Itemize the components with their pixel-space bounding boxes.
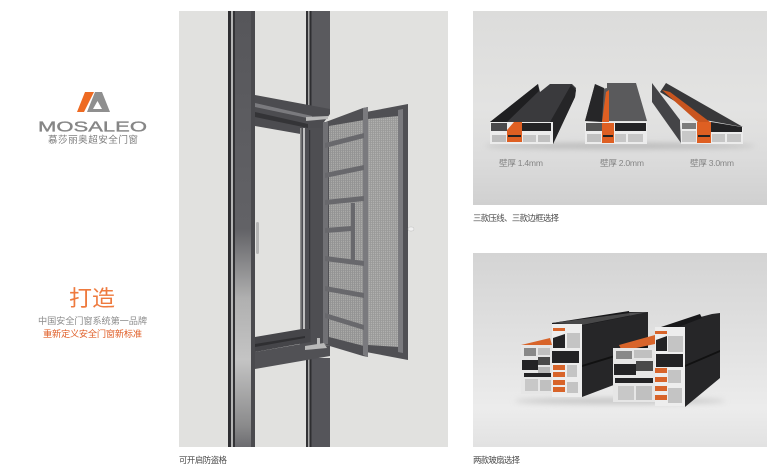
profile 3.0mm <box>652 83 743 144</box>
sash profile left <box>521 311 648 397</box>
slogan heading: 打造 <box>69 286 115 311</box>
right column <box>306 11 330 447</box>
left sash extrusion body <box>552 312 648 397</box>
slogan <box>38 286 147 339</box>
slogan line 2: 重新定义安全门窗新标准 <box>43 328 142 339</box>
left column <box>228 11 255 447</box>
hinges <box>305 116 328 350</box>
panel: two sash profiles <box>473 253 767 447</box>
panel: openable security window <box>179 11 448 447</box>
profile label 2.0mm: 壁厚 2.0mm <box>600 157 644 168</box>
profile label 3.0mm: 壁厚 3.0mm <box>690 157 734 168</box>
window handle <box>256 222 259 254</box>
logo mark <box>77 92 110 112</box>
outer security screen leaf <box>366 104 414 360</box>
grille bars <box>325 133 364 330</box>
left sash cross-section <box>521 324 582 397</box>
sash profile right <box>613 313 720 407</box>
caption: three frame profiles: 三款压线、三款边框选择 <box>473 213 560 223</box>
logo chinese name: 慕莎丽奥超安全门窗 <box>48 134 138 146</box>
logo <box>38 92 147 146</box>
caption: openable security window: 可开启防盗格 <box>179 455 228 465</box>
slogan line 1: 中国安全门窗系统第一品牌 <box>38 315 147 326</box>
profile 1.4mm <box>490 84 576 144</box>
profile 2.0mm <box>585 83 647 144</box>
caption: two sash profiles: 两款玻扇选择 <box>473 455 521 465</box>
profile label 1.4mm: 壁厚 1.4mm <box>499 157 543 168</box>
inner security grille leaf <box>323 107 368 357</box>
leaf latch <box>408 227 414 231</box>
right sash cross-section <box>613 327 685 406</box>
panel: three frame profiles <box>473 11 767 205</box>
window frame <box>255 95 330 369</box>
right sash extrusion body <box>655 313 720 407</box>
logo wordmark: MOSALEO <box>38 118 147 136</box>
